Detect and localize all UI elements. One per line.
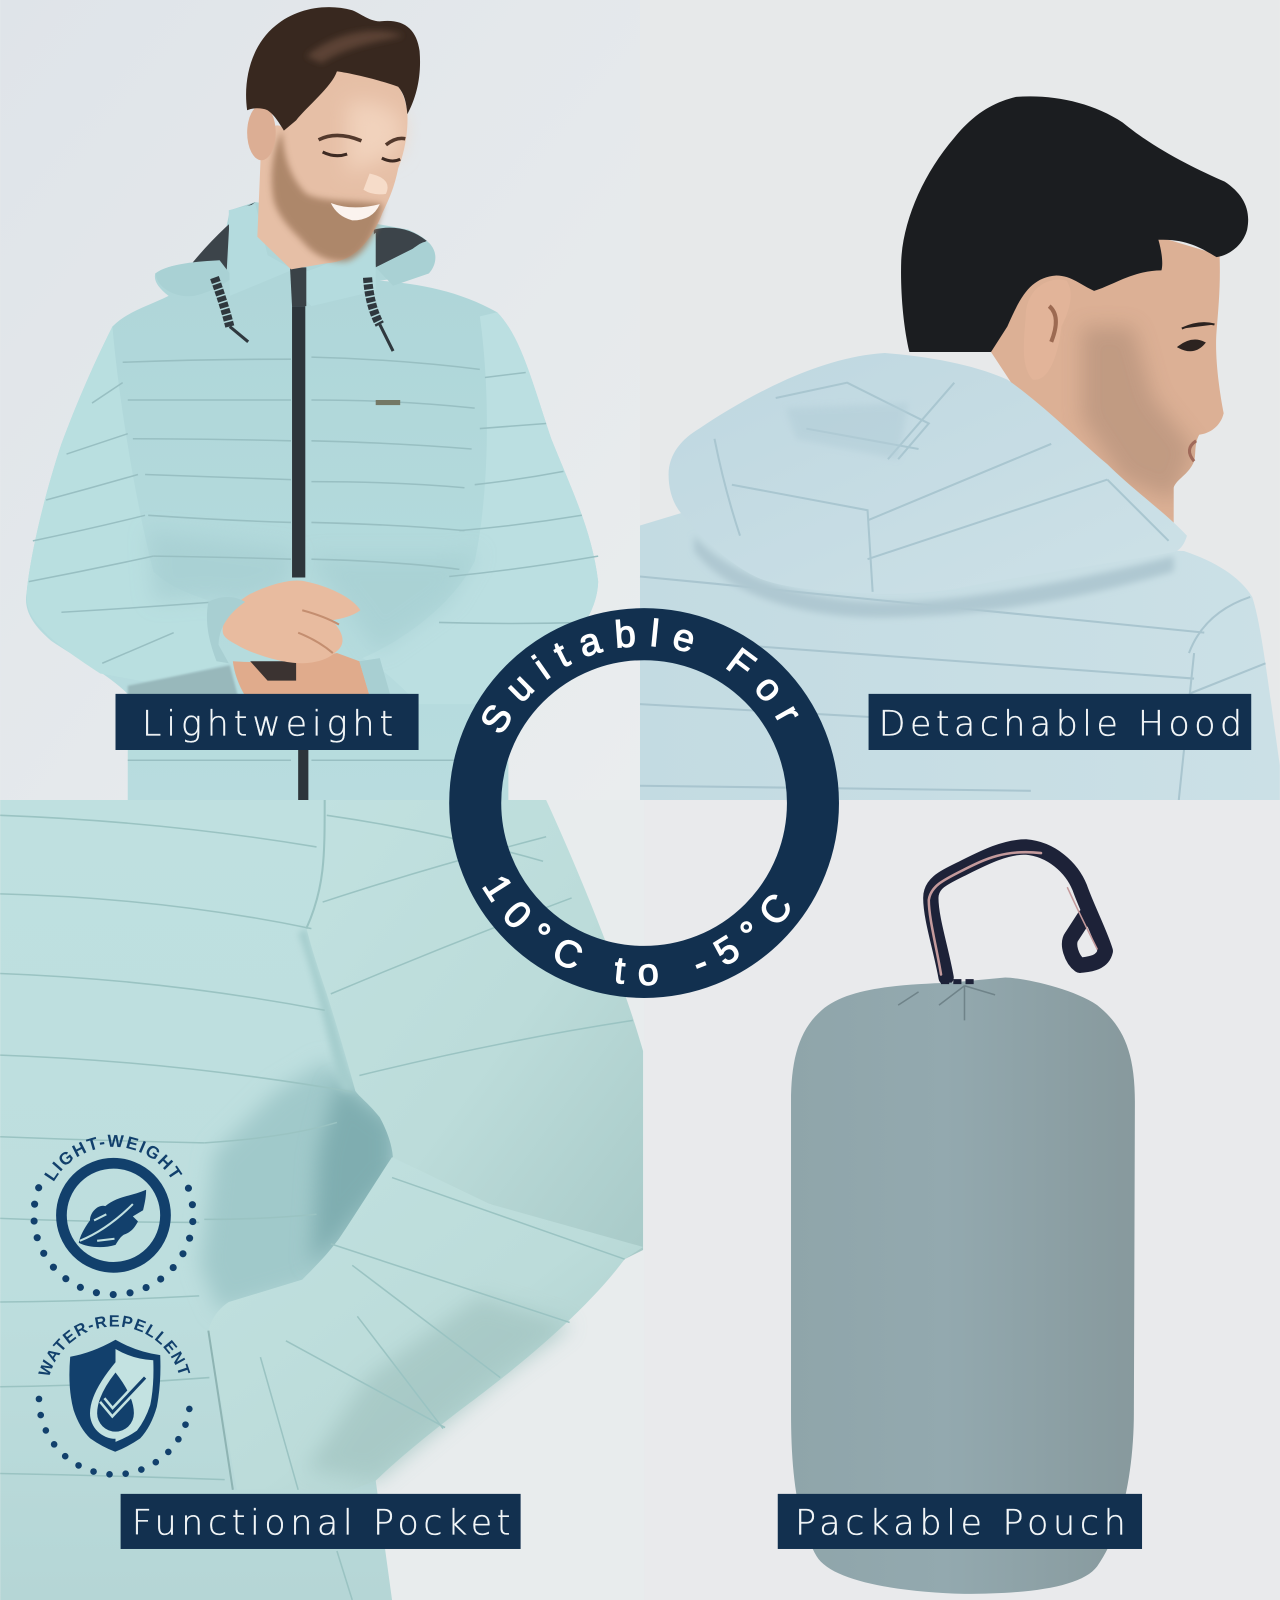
armpit shadow wide — [200, 1061, 398, 1311]
eyes, brows, smile — [319, 135, 405, 220]
jacket body — [26, 202, 598, 800]
ear — [1024, 280, 1071, 380]
badge: water-repellent — [36, 1315, 193, 1478]
hood — [669, 353, 1187, 594]
badge dotted arc — [34, 1188, 193, 1295]
upper sleeve — [306, 800, 643, 1259]
icon: shield — [69, 1340, 160, 1452]
badge circle — [61, 1163, 166, 1267]
sleeve cuffs — [207, 597, 390, 696]
lower hand — [233, 653, 370, 696]
ring text: suitable for: Suitable For — [482, 618, 798, 732]
pouch gather — [898, 982, 995, 1020]
ear — [247, 105, 276, 160]
armpit shadow core — [311, 1082, 393, 1265]
back quilting — [640, 577, 1266, 800]
torso — [0, 800, 408, 1600]
label: packable pouch: Packable Pouch — [795, 1504, 1126, 1544]
eye and brow — [1179, 323, 1214, 350]
label: detachable hood: Detachable Hood — [879, 705, 1242, 745]
neck and face — [991, 237, 1224, 526]
chest patch — [376, 400, 400, 405]
badge dotted arc — [39, 1399, 190, 1474]
upper hand — [223, 581, 360, 663]
icon: feather — [79, 1190, 146, 1247]
ring text: temperature range: 10°C to -5°C — [482, 876, 790, 986]
label: functional pocket — [121, 1494, 521, 1549]
panel: functional pocket (jacket close-up) — [0, 800, 643, 1600]
lips — [1189, 441, 1196, 461]
badge: light-weight — [30, 1134, 196, 1298]
collar — [229, 204, 376, 306]
watch band — [250, 661, 296, 681]
badge arc text: LIGHT-WEIGHT — [44, 1134, 182, 1182]
neck and face — [247, 61, 408, 269]
temperature ring — [449, 608, 839, 998]
hood interior — [192, 202, 427, 270]
quilting lines — [29, 357, 598, 760]
panel: lightweight (man wearing jacket) — [0, 0, 640, 800]
pouch strap — [929, 847, 1105, 978]
label: lightweight: Lightweight — [142, 705, 393, 745]
right sleeve — [362, 312, 598, 704]
zipper — [292, 306, 308, 800]
beard — [272, 131, 383, 261]
drawcords — [214, 278, 393, 351]
label: detachable hood — [869, 694, 1251, 750]
badge arc text: WATER-REPELLENT — [38, 1315, 190, 1375]
finger lines — [298, 610, 339, 653]
label: functional pocket: Functional Pocket — [132, 1504, 510, 1544]
label: lightweight — [116, 694, 419, 750]
hair — [901, 96, 1248, 352]
hood edges — [155, 242, 435, 296]
lower torso shadow — [128, 665, 240, 704]
shadow under hood — [694, 536, 1174, 617]
hair highlight — [306, 31, 403, 63]
forearm — [208, 1157, 643, 1490]
pouch body — [791, 978, 1135, 1594]
forearm shade — [306, 1296, 572, 1481]
beard shadow — [1082, 327, 1194, 500]
label: packable pouch — [778, 1494, 1142, 1549]
upper sleeve fold shadow — [298, 928, 355, 1091]
hood folds — [786, 403, 908, 459]
quilting lines — [0, 800, 633, 1600]
hood seams — [714, 383, 1169, 592]
jacket back — [640, 512, 1280, 800]
panel: packable pouch — [644, 800, 1280, 1600]
hair — [246, 7, 420, 131]
left sleeve — [27, 327, 227, 683]
panel: detachable hood (man seen from behind) — [640, 96, 1280, 800]
